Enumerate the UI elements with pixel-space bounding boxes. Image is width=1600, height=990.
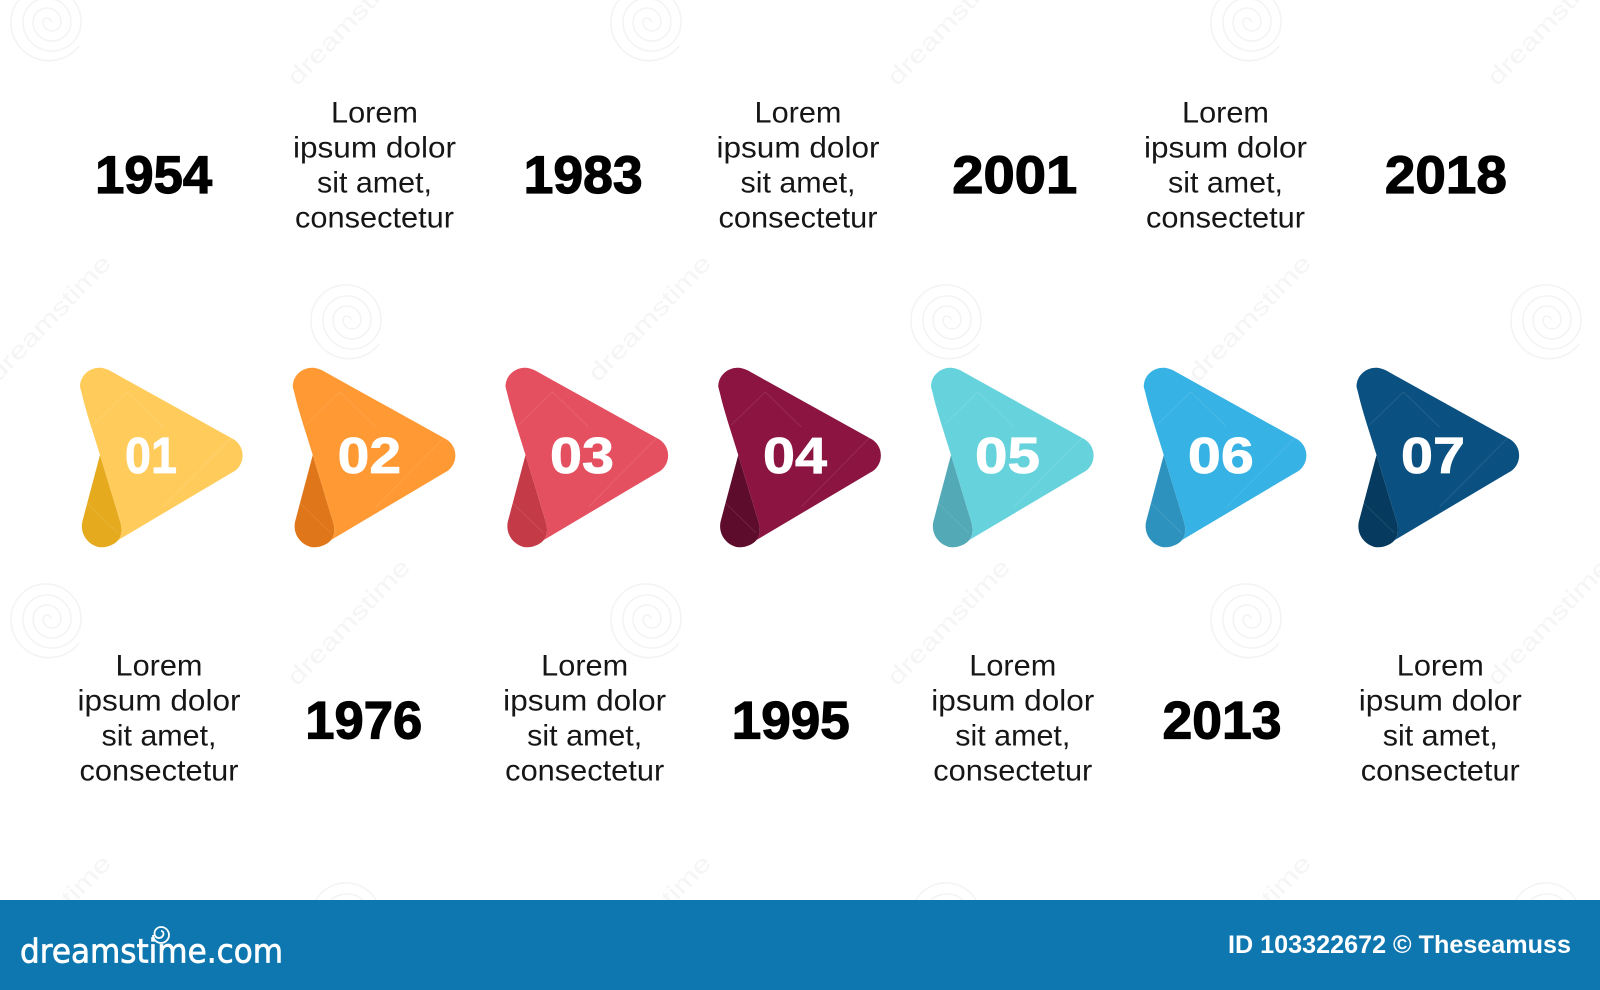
text block: bottom 1: ipsum dolor <box>78 685 241 718</box>
text block: bottom 3 <box>931 650 1094 788</box>
text block: top 2 <box>716 97 880 235</box>
text block: top 2: Lorem <box>754 97 842 130</box>
image id and credit: ID 103322672 © Theseamuss <box>1228 931 1571 959</box>
text block: bottom 4: consectetur <box>1361 755 1520 788</box>
arrow 07 <box>1356 368 1519 547</box>
text block: bottom 2: ipsum dolor <box>503 685 666 718</box>
year 1995: 1995 <box>732 692 850 750</box>
text block: bottom 4 <box>1359 650 1522 788</box>
text block: bottom 4: sit amet, <box>1383 720 1498 753</box>
text block: top 1: sit amet, <box>317 167 432 200</box>
text block: bottom 1: sit amet, <box>102 720 216 753</box>
text block: bottom 2: consectetur <box>505 755 664 788</box>
watermark pattern: dreamstime <box>1183 850 1317 987</box>
text block: bottom 1 <box>78 650 241 788</box>
watermark pattern: dreamstime <box>1482 554 1600 691</box>
text block: top 2: consectetur <box>718 202 878 235</box>
text block: bottom 3: sit amet, <box>955 720 1070 753</box>
text block: bottom 2: sit amet, <box>527 720 642 753</box>
year 1976: 1976 <box>305 692 422 750</box>
watermark pattern: dreamstime <box>583 250 717 387</box>
text block: top 3: Lorem <box>1182 97 1269 130</box>
text block: bottom 2 <box>503 650 666 788</box>
arrow 06: 06 <box>1188 427 1254 484</box>
icon: logo spiral <box>153 927 169 943</box>
text block: bottom 1: consectetur <box>80 755 239 788</box>
text block: top 1: ipsum dolor <box>293 132 456 165</box>
arrow 03: 03 <box>550 427 614 484</box>
text block: bottom 4: Lorem <box>1397 650 1484 683</box>
year 1954: 1954 <box>95 146 213 205</box>
arrow 02 <box>293 368 455 547</box>
text block: top 2: ipsum dolor <box>716 132 880 165</box>
year 2013: 2013 <box>1162 692 1282 750</box>
watermark pattern: dreamstime <box>1183 250 1317 387</box>
text block: bottom 1: Lorem <box>116 650 202 683</box>
year 1983: 1983 <box>524 146 643 205</box>
arrow 04 <box>718 368 881 547</box>
text block: top 3: sit amet, <box>1168 167 1283 200</box>
arrow 01: 01 <box>125 427 177 484</box>
watermark pattern: dreamstime <box>583 850 717 987</box>
text block: bottom 4: ipsum dolor <box>1359 685 1522 718</box>
watermark pattern: dreamstime <box>882 554 1016 691</box>
text block: bottom 3: consectetur <box>933 755 1092 788</box>
text block: bottom 3: ipsum dolor <box>931 685 1094 718</box>
watermark pattern: dreamstime <box>282 554 416 691</box>
text block: bottom 2: Lorem <box>541 650 628 683</box>
text block: top 3: ipsum dolor <box>1144 132 1307 165</box>
text block: top 2: sit amet, <box>740 167 856 200</box>
arrow 04: 04 <box>763 427 828 484</box>
text block: top 3: consectetur <box>1146 202 1305 235</box>
arrow 01 <box>80 368 243 547</box>
text block: top 1 <box>293 97 456 235</box>
text block: top 1: consectetur <box>295 202 454 235</box>
year 2001: 2001 <box>952 146 1077 205</box>
arrow 06 <box>1144 368 1306 547</box>
text block: top 1: Lorem <box>331 97 418 130</box>
arrow 05 <box>931 368 1094 547</box>
text block: top 3 <box>1144 97 1307 235</box>
arrow 02: 02 <box>338 427 401 484</box>
text block: bottom 3: Lorem <box>969 650 1056 683</box>
arrow 03 <box>506 368 668 547</box>
footer banner <box>0 900 1600 990</box>
logo text: dreamstime.com <box>20 932 283 971</box>
arrow 05: 05 <box>975 427 1040 484</box>
year 2018: 2018 <box>1385 146 1507 205</box>
arrow 07: 07 <box>1401 427 1465 484</box>
